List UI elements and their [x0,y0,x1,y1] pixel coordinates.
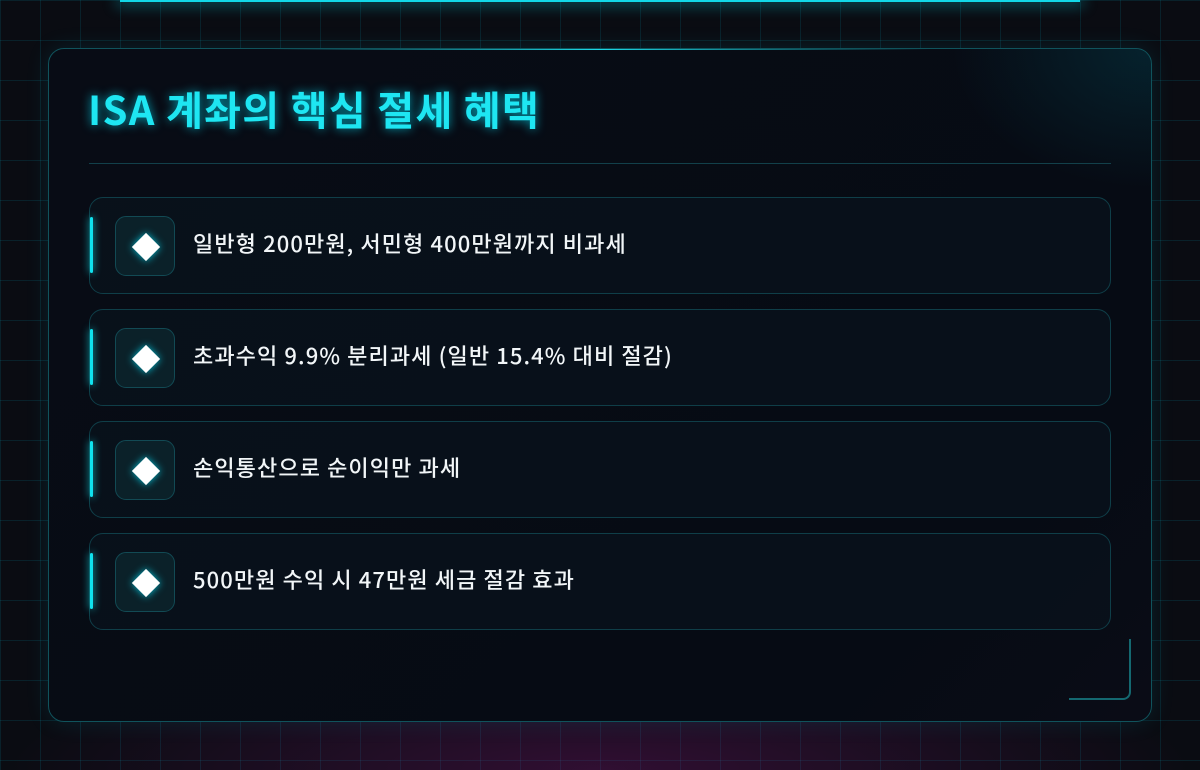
icon: diamond [115,552,175,612]
text 4: 500만원 수익 시 47만원 세금 절감 효과 [193,563,575,595]
icon: diamond [115,440,175,500]
text 2: 초과수익 9.9% 분리과세 (일반 15.4% 대비 절감) [193,339,673,371]
item 2 [89,309,1111,406]
text 1: 일반형 200만원, 서민형 400만원까지 비과세 [193,227,627,259]
item 3 [89,421,1111,518]
icon: diamond [115,216,175,276]
icon: diamond [115,328,175,388]
text 3: 손익통산으로 순이익만 과세 [193,451,461,483]
title: ISA 계좌의 핵심 절세 혜택 [88,79,540,137]
item 4 [89,533,1111,630]
corner bracket [1069,639,1131,700]
item 1 [89,197,1111,294]
